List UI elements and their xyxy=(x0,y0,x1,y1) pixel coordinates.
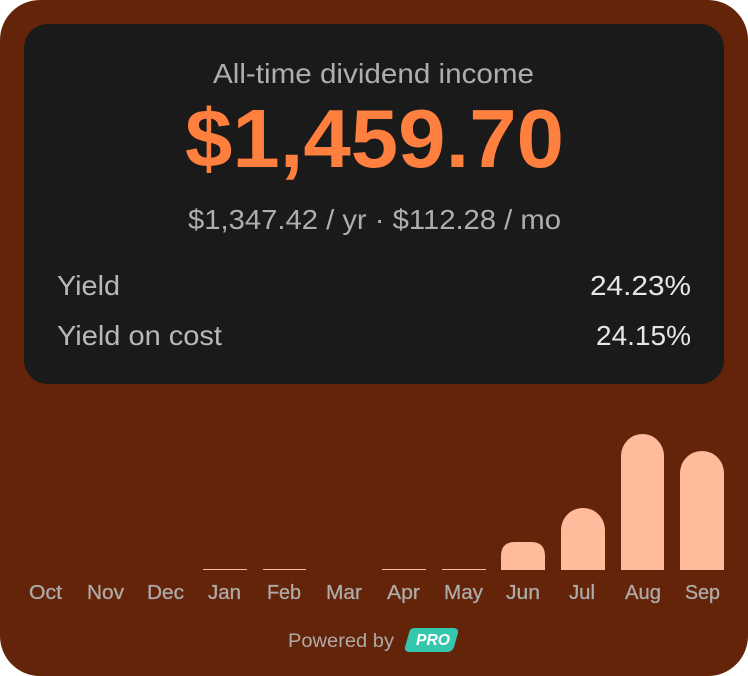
month labels: May xyxy=(444,582,483,604)
yield label: Yield xyxy=(57,270,120,301)
yield on cost value: 24.15% xyxy=(596,320,691,351)
month labels: Apr xyxy=(387,582,420,604)
yield on cost label: Yield on cost xyxy=(57,320,222,351)
month labels: Sep xyxy=(685,582,720,604)
total dividend amount: $1,459.70 xyxy=(185,92,564,185)
panel: dividend summary xyxy=(24,24,724,384)
bar chart: monthly dividends xyxy=(29,434,724,604)
footer: powered by pro xyxy=(288,628,458,652)
bars xyxy=(203,434,724,570)
month labels: Aug xyxy=(625,582,661,604)
month labels: Jun xyxy=(506,582,540,604)
month labels: Dec xyxy=(147,582,184,604)
pro badge xyxy=(405,628,458,652)
pro badge: PRO xyxy=(416,632,451,649)
yield on cost row xyxy=(57,320,691,351)
month labels: Jan xyxy=(208,582,241,604)
yield row xyxy=(57,270,691,301)
annual and monthly income: $1,347.42 / yr · $112.28 / mo xyxy=(188,204,561,235)
heading: all-time dividend income: All-time dividend income xyxy=(213,58,534,89)
month labels: Nov xyxy=(87,582,124,604)
yield value: 24.23% xyxy=(590,270,691,301)
month labels: Feb xyxy=(267,582,301,604)
month labels: Oct xyxy=(29,582,62,604)
powered by text: Powered by xyxy=(288,630,394,652)
month labels xyxy=(29,582,720,604)
month labels: Jul xyxy=(569,582,595,604)
month labels: Mar xyxy=(326,582,362,604)
